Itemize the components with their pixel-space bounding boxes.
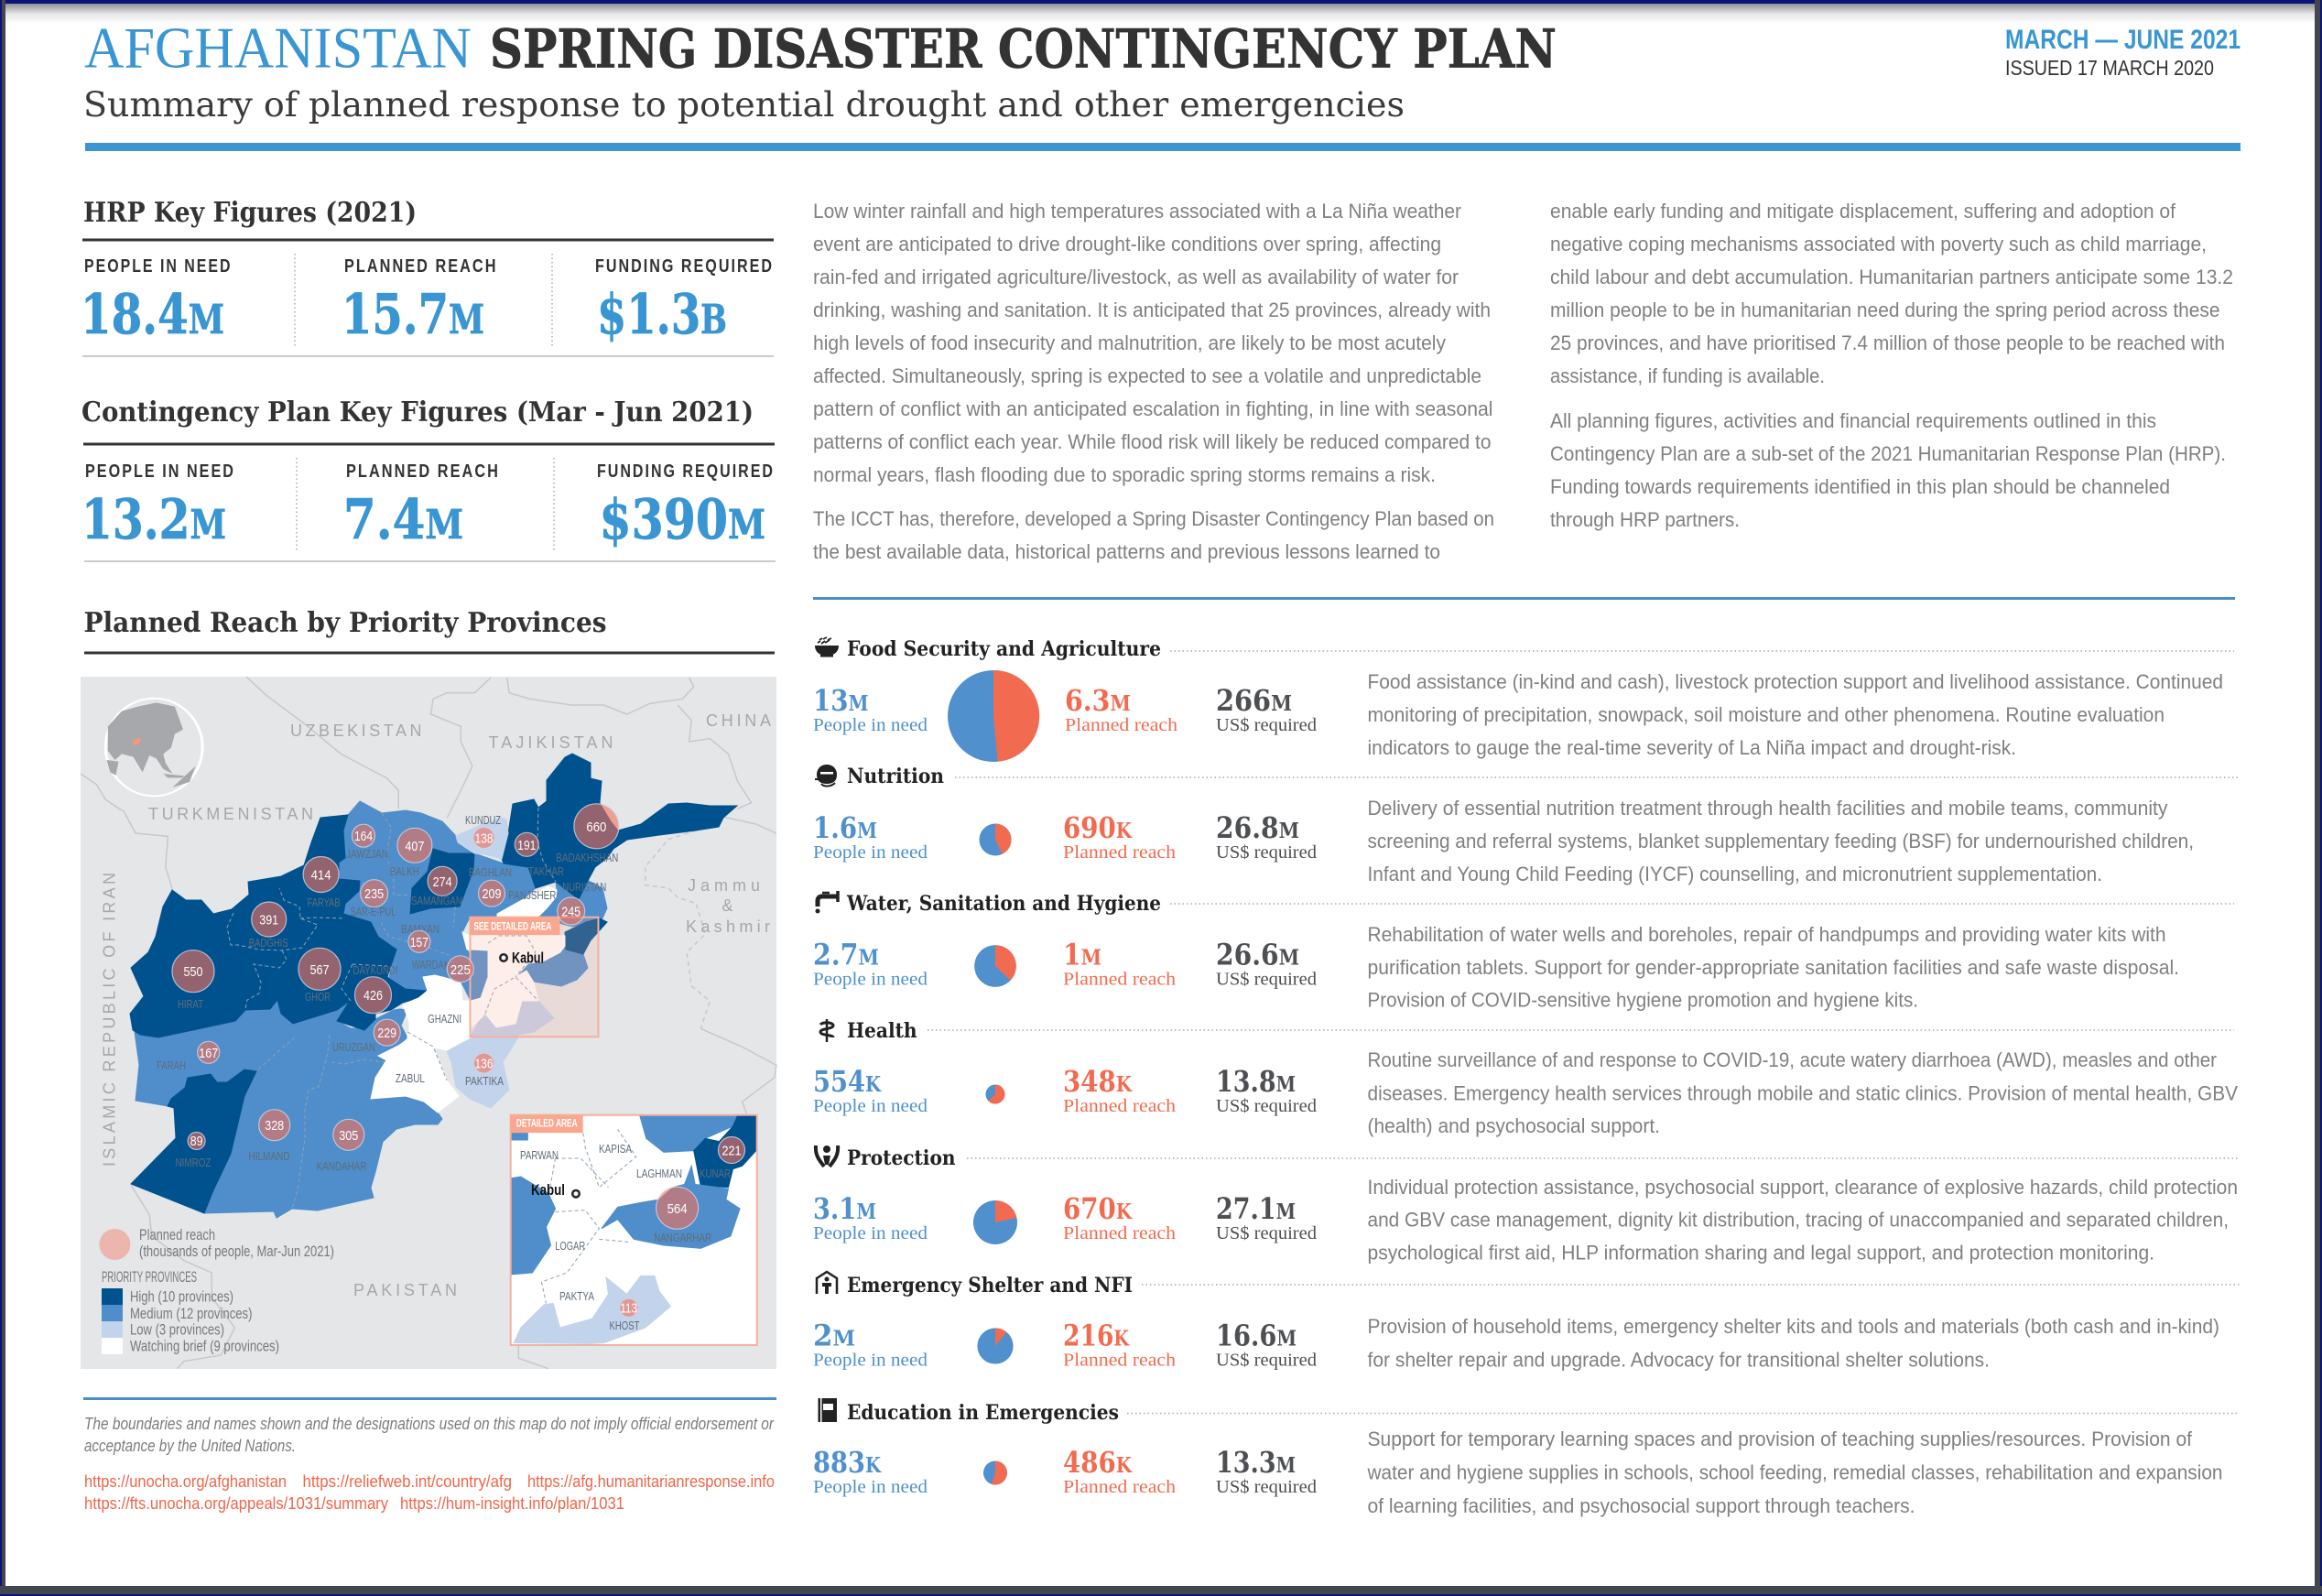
funding: 16.6M [1216, 1319, 1297, 1353]
planned reach [1063, 1319, 1176, 1370]
province labels [157, 813, 618, 1173]
funding: US$ required [1216, 715, 1317, 735]
pie chart [974, 945, 1016, 987]
people in need [813, 810, 928, 863]
icon: hands and person [816, 1145, 838, 1167]
people in need: 13M [813, 683, 868, 718]
people in need: People in need [813, 969, 928, 989]
links: https://reliefweb.int/country/afg [302, 1472, 512, 1491]
description: screening and referral systems, blanket supplementary feeding (BSF) for undernourished children, [1368, 830, 2194, 852]
description: indicators to gauge the real-time severity of La Niña impact and drought-risk. [1368, 736, 2016, 759]
links: https://hum-insight.info/plan/1031 [400, 1494, 624, 1513]
people in need [813, 938, 928, 989]
figure: contingency planned reach: 7.4M [343, 488, 463, 552]
planned reach: Planned reach [1063, 1223, 1176, 1243]
people in need: People in need [813, 1350, 928, 1370]
intro text column 1: Low winter rainfall and high temperatures associated with a La Niña weather [813, 200, 1461, 223]
people in need: People in need [813, 1477, 928, 1497]
icon: book [819, 1398, 837, 1422]
province labels: FARYAB [308, 896, 341, 909]
planned reach bubbles: 225 [450, 962, 471, 978]
planned reach: Planned reach [1063, 842, 1176, 863]
intro text column 1: affected. Simultaneously, spring is expected to see a volatile and unpredictable [813, 364, 1481, 387]
heading: Emergency Shelter and NFI [847, 1274, 1133, 1297]
date block [2005, 25, 2241, 80]
funding: 13.3M [1216, 1445, 1296, 1480]
funding: US$ required [1216, 842, 1317, 863]
planned reach bubbles: 113 [620, 1300, 637, 1317]
people in need [813, 683, 928, 735]
country labels: & [722, 896, 733, 915]
icon: staff with snake [820, 1019, 833, 1042]
inset: detailed area: LOGAR [555, 1239, 585, 1253]
people in need [813, 1064, 928, 1116]
heading: contingency plan key figures: Contingency Plan Key Figures (Mar - Jun 2021) [81, 396, 754, 429]
figure: contingency planned reach: PLANNED REACH [346, 461, 500, 482]
province labels: JAWZJAN [346, 847, 388, 861]
map legend: Medium (12 provinces) [130, 1305, 253, 1322]
medium-priority provinces [135, 801, 607, 1218]
province labels: SAMANGAN [411, 894, 462, 907]
inset: detailed area [511, 1115, 757, 1345]
disclaimer: The boundaries and names shown and the designations used on this map do not imply official endorsement or [84, 1415, 775, 1433]
planned reach bubbles: 567 [309, 962, 330, 978]
inset: detailed area: NANGARHAR [654, 1231, 711, 1244]
pie chart [948, 670, 1039, 762]
funding [1216, 938, 1317, 989]
planned reach [1063, 1191, 1176, 1243]
planned reach bubbles: 138 [474, 831, 493, 846]
province labels: TAKHAR [528, 864, 564, 878]
sector: health [813, 1019, 2238, 1137]
planned reach: 348K [1063, 1064, 1133, 1099]
pie chart [983, 1461, 1007, 1485]
heading: Protection [847, 1146, 956, 1170]
planned reach: 1M [1063, 938, 1101, 972]
map panel [81, 677, 776, 1369]
funding: 266M [1216, 683, 1292, 718]
country labels: Kashmir [686, 917, 770, 936]
links: https://fts.unocha.org/appeals/1031/summary [84, 1494, 388, 1513]
description: (health) and psychosocial support. [1368, 1114, 1660, 1137]
province labels: FARAH [157, 1059, 186, 1072]
intro text column 2: Funding towards requirements identified in this plan should be channeled [1550, 475, 2170, 498]
inset: detailed area: KHOST [610, 1319, 640, 1332]
planned reach bubbles: 164 [354, 829, 373, 844]
province labels: BAMYAN [401, 922, 439, 936]
planned reach [1063, 1445, 1176, 1497]
intro text column 2: 25 provinces, and have prioritised 7.4 million of those people to be reached with [1550, 331, 2225, 354]
funding [1216, 1191, 1317, 1243]
people in need: People in need [813, 1096, 928, 1116]
province labels: BADAKHSHAN [556, 851, 618, 864]
pie chart [980, 824, 1011, 855]
planned reach: Planned reach [1063, 1350, 1176, 1370]
date block: ISSUED 17 MARCH 2020 [2005, 56, 2214, 80]
people in need: People in need [813, 715, 928, 735]
icon: bowl with grain [815, 637, 839, 657]
province labels: DAYKUNDI [353, 963, 397, 977]
sector: water, sanitation and hygiene [813, 891, 2234, 1011]
description [1368, 1176, 2238, 1264]
planned reach bubbles: 414 [311, 868, 331, 883]
description [1367, 1428, 2223, 1517]
description [1368, 923, 2179, 1011]
inset: detailed area: PAKTYA [559, 1289, 594, 1303]
intro text column 1: the best available data, historical patterns and previous lessons learned to [813, 540, 1440, 563]
planned reach: 670K [1063, 1191, 1133, 1226]
map legend: (thousands of people, Mar-Jun 2021) [139, 1243, 334, 1260]
planned reach bubbles: 550 [183, 964, 203, 980]
description: Rehabilitation of water wells and boreholes, repair of handpumps and providing water kits with [1368, 923, 2166, 946]
description: Infant and Young Child Feeding (IYCF) counselling, and micronutrient supplementation. [1368, 863, 2102, 885]
high-priority provinces [130, 754, 737, 1213]
disclaimer: acceptance by the United Nations. [84, 1437, 296, 1455]
people in need: People in need [813, 1223, 928, 1243]
inset: detailed area: Kabul [531, 1181, 565, 1199]
country labels [101, 711, 771, 1299]
planned reach bubbles [172, 804, 745, 1317]
province labels: GHOR [305, 990, 331, 1004]
province labels: SAR-E-PUL [350, 905, 396, 918]
map legend: Watching brief (9 provinces) [130, 1338, 279, 1355]
figure: contingency funding required: FUNDING REQUIRED [597, 461, 775, 482]
people in need [813, 1319, 928, 1370]
intro text column 2 [1550, 200, 2233, 531]
description [1368, 797, 2194, 885]
funding: 13.8M [1216, 1064, 1296, 1099]
figure: funding required: $1.3B [597, 283, 727, 347]
map legend [99, 1226, 334, 1355]
inset: detailed area: KUNAR [700, 1167, 731, 1180]
province labels: KUNDUZ [465, 813, 501, 827]
people in need: 883K [813, 1445, 882, 1480]
planned reach bubbles: 305 [339, 1128, 358, 1144]
planned reach bubbles: 235 [364, 886, 384, 902]
province labels: URUZGAN [332, 1040, 375, 1054]
people in need [813, 1445, 928, 1497]
icon: person under shelter [817, 1272, 837, 1294]
description: and GBV case management, dignity kit distribution, tracing of unaccompanied and separated children, [1368, 1209, 2229, 1231]
planned reach bubbles: 229 [377, 1026, 396, 1041]
watching-brief provinces [371, 886, 565, 1113]
figure: contingency people in need: PEOPLE IN NEED [85, 461, 235, 482]
province labels: BAGHLAN [469, 865, 512, 879]
inset: detailed area: KAPISA [599, 1142, 632, 1156]
planned reach bubbles: 328 [265, 1118, 284, 1134]
province labels: NIMROZ [176, 1156, 212, 1169]
people in need: 1.6M [813, 810, 877, 845]
figure: contingency funding required: $390M [599, 488, 765, 552]
country labels: TAJIKISTAN [489, 733, 613, 752]
intro text column 2: All planning figures, activities and financial requirements outlined in this [1550, 409, 2156, 432]
heading: Health [847, 1019, 917, 1043]
province labels: WARDAK [412, 958, 450, 972]
planned reach: 690K [1063, 810, 1133, 845]
province labels: HIRAT [178, 997, 203, 1011]
planned reach bubbles: 191 [517, 838, 536, 853]
pie chart [985, 1084, 1005, 1104]
icon: head with spoon [815, 765, 837, 787]
figure: people in need: PEOPLE IN NEED [84, 256, 233, 277]
see detailed area box: SEE DETAILED AREA [473, 920, 552, 933]
intro text column 1: high levels of food insecurity and malnutrition, are likely to be most acutely [813, 331, 1446, 354]
globe locator [105, 699, 202, 796]
header rule [85, 143, 2241, 151]
description: psychological first aid, HLP information sharing and legal support, and protection monitoring. [1368, 1242, 2154, 1264]
intro text column 2: million people to be in humanitarian need during the spring period across these [1550, 299, 2219, 321]
description [1368, 1048, 2238, 1137]
planned reach bubbles: 136 [474, 1057, 493, 1071]
figure: contingency planned reach [343, 461, 500, 552]
funding: US$ required [1216, 969, 1317, 989]
province labels: HILMAND [249, 1149, 289, 1163]
planned reach bubbles: 426 [363, 988, 383, 1004]
country labels: CHINA [706, 711, 771, 730]
planned reach bubbles: 157 [410, 935, 429, 950]
planned reach bubbles: 209 [482, 886, 502, 902]
planned reach: Planned reach [1063, 1096, 1176, 1116]
figure: planned reach: 15.7M [342, 283, 484, 347]
description: Delivery of essential nutrition treatment through health facilities and mobile teams, community [1368, 797, 2168, 820]
intro text column 1: event are anticipated to drive drought-like conditions over spring, affecting [813, 233, 1441, 255]
figure: contingency people in need: 13.2M [81, 488, 226, 552]
heading: Water, Sanitation and Hygiene [846, 892, 1161, 916]
funding: US$ required [1216, 1223, 1317, 1243]
date block: MARCH — JUNE 2021 [2005, 25, 2241, 55]
intro text column 2: enable early funding and mitigate displacement, suffering and adoption of [1550, 200, 2176, 223]
intro text column 1: patterns of conflict each year. While flood risk will likely be reduced compared to [813, 430, 1491, 453]
funding [1216, 1064, 1317, 1116]
province labels: BALKH [390, 864, 419, 878]
sector: nutrition [813, 765, 2239, 885]
planned reach bubbles: 221 [722, 1143, 742, 1159]
map legend: High (10 provinces) [130, 1288, 233, 1306]
description: purification tablets. Support for gender-appropriate sanitation facilities and safe waste disposal. [1368, 956, 2179, 979]
description: of learning facilities, and psychosocial support through teachers. [1368, 1494, 1915, 1517]
description: Food assistance (in-kind and cash), livestock protection support and livelihood assistance. Continued [1368, 670, 2223, 693]
description: Provision of household items, emergency shelter kits and tools and materials (both cash and in-kind) [1368, 1315, 2219, 1338]
planned reach bubbles: 89 [190, 1134, 203, 1149]
country labels: PAKISTAN [353, 1281, 457, 1299]
people in need: 2.7M [813, 938, 879, 972]
heading: HRP key figures: HRP Key Figures (2021) [83, 197, 417, 229]
funding: US$ required [1216, 1477, 1317, 1497]
province labels: BADGHIS [249, 936, 288, 950]
planned reach: Planned reach [1063, 1477, 1176, 1497]
funding [1216, 1319, 1317, 1370]
sector: food security and agriculture [813, 637, 2234, 762]
figure: funding required [595, 256, 774, 347]
planned reach: Planned reach [1063, 969, 1176, 989]
inset: detailed area: PARWAN [520, 1148, 559, 1162]
sector: protection [813, 1145, 2238, 1264]
description: Individual protection assistance, psychosocial support, clearance of explosive hazards, child protection [1368, 1176, 2238, 1199]
planned reach bubbles: 245 [561, 905, 580, 919]
planned reach bubbles: 274 [433, 874, 452, 890]
title: AFGHANISTAN [84, 16, 472, 81]
people in need: People in need [813, 842, 928, 863]
people in need: 2M [813, 1319, 855, 1353]
funding: 26.8M [1216, 810, 1299, 845]
map legend: Planned reach [139, 1226, 215, 1243]
province labels: KANDAHAR [317, 1159, 366, 1173]
planned reach bubbles: 564 [667, 1201, 688, 1217]
see detailed area box: Kabul [512, 950, 544, 967]
planned reach bubbles: 407 [405, 839, 424, 854]
planned reach bubbles: 167 [199, 1046, 218, 1061]
province labels: ZABUL [396, 1071, 425, 1085]
figure: planned reach: PLANNED REACH [344, 256, 498, 277]
subtitle: Summary of planned response to potential drought and other emergencies [83, 85, 1405, 125]
description [1368, 1315, 2219, 1372]
funding: 27.1M [1216, 1191, 1296, 1226]
people in need: 554K [813, 1064, 882, 1099]
planned reach: Planned reach [1065, 715, 1177, 735]
heading: Education in Emergencies [847, 1401, 1119, 1425]
description [1368, 670, 2223, 759]
figure: people in need: 18.4M [81, 283, 224, 347]
intro text column 1: The ICCT has, therefore, developed a Spring Disaster Contingency Plan based on [813, 507, 1494, 530]
map legend: PRIORITY PROVINCES [102, 1268, 197, 1286]
description: Routine surveillance of and response to COVID-19, acute watery diarrhoea (AWD), measles and other [1368, 1048, 2217, 1071]
neighbouring country borders [81, 677, 776, 1369]
intro text column 2: through HRP partners. [1550, 508, 1740, 531]
funding: US$ required [1216, 1096, 1317, 1116]
inset: detailed area: LAGHMAN [636, 1167, 682, 1180]
links [84, 1472, 775, 1513]
intro text column 2: child labour and debt accumulation. Humanitarian partners anticipate some 13.2 [1550, 266, 2233, 288]
intro text column 1: pattern of conflict with an anticipated escalation in fighting, in line with seasonal [813, 397, 1492, 420]
pie chart [973, 1200, 1017, 1244]
figure: contingency funding required [597, 461, 775, 552]
see detailed area box [471, 917, 599, 1037]
icon: tap with drop [815, 891, 838, 914]
description: diseases. Emergency health services through mobile and static clinics. Provision of mental health, GBV [1368, 1082, 2238, 1104]
figure: planned reach [342, 256, 498, 347]
links: https://unocha.org/afghanistan [84, 1472, 287, 1491]
description: monitoring of precipitation, snowpack, soil moisture and other phenomena. Routine evaluation [1368, 703, 2165, 726]
planned reach [1063, 1064, 1176, 1116]
description: Support for temporary learning spaces and provision of teaching supplies/resources. Provision of [1368, 1428, 2193, 1450]
title: SPRING DISASTER CONTINGENCY PLAN [490, 18, 1557, 81]
country labels: TURKMENISTAN [148, 805, 313, 823]
planned reach: 486K [1063, 1445, 1133, 1480]
heading: planned reach by priority provinces: Planned Reach by Priority Provinces [84, 607, 606, 639]
footer: disclaimer and links [83, 1397, 776, 1513]
planned reach bubbles: 660 [586, 820, 606, 835]
intro text column 2: assistance, if funding is available. [1550, 364, 1825, 387]
pie chart [977, 1328, 1014, 1364]
planned reach: 6.3M [1065, 683, 1131, 718]
intro text column 2: negative coping mechanisms associated with poverty such as child marriage, [1550, 233, 2207, 255]
district boundaries [227, 808, 556, 1209]
people in need [813, 1191, 928, 1243]
funding [1216, 1445, 1317, 1497]
intro text column 1: rain-fed and irrigated agriculture/livestock, as well as availability of water for [813, 266, 1459, 288]
funding: 26.6M [1216, 938, 1299, 972]
funding [1216, 810, 1317, 863]
country labels: Jammu [688, 876, 760, 895]
panel: contingency plan key figures [81, 396, 776, 562]
country labels: ISLAMIC REPUBLIC OF IRAN [101, 873, 119, 1167]
heading: Food Security and Agriculture [847, 637, 1161, 661]
figure: funding required: FUNDING REQUIRED [595, 256, 774, 277]
funding [1216, 683, 1317, 735]
intro text column 1: normal years, flash flooding due to sporadic spring storms remains a risk. [813, 463, 1436, 486]
province labels: NURISTAN [562, 880, 606, 894]
intro text column 2: Contingency Plan are a sub-set of the 2021 Humanitarian Response Plan (HRP). [1550, 442, 2226, 465]
inset: detailed area: DETAILED AREA [516, 1117, 578, 1130]
panel: HRP key figures [81, 197, 774, 357]
province labels: PANJSHER [508, 888, 556, 902]
heading: Nutrition [847, 765, 944, 788]
country labels: UZBEKISTAN [290, 722, 421, 740]
funding: US$ required [1216, 1350, 1317, 1370]
intro text column 1 [813, 200, 1494, 563]
people in need: 3.1M [813, 1191, 876, 1226]
province labels: PAKTIKA [465, 1074, 504, 1088]
sector: education in emergencies [813, 1398, 2237, 1517]
disclaimer [84, 1415, 775, 1455]
planned reach [1065, 683, 1177, 735]
links: https://afg.humanitarianresponse.info [527, 1472, 775, 1491]
planned reach [1063, 938, 1176, 989]
province labels: GHAZNI [428, 1012, 461, 1026]
planned reach [1063, 810, 1176, 863]
sector: emergency shelter and NFI [813, 1272, 2241, 1372]
description: for shelter repair and upgrade. Advocacy for transitional shelter solutions. [1368, 1348, 1990, 1372]
planned reach bubbles: 391 [259, 912, 278, 928]
description: Provision of COVID-sensitive hygiene promotion and hygiene kits. [1368, 989, 1918, 1011]
low-priority provinces [447, 818, 554, 1108]
intro text column 1: drinking, washing and sanitation. It is anticipated that 25 provinces, already with [813, 299, 1491, 321]
description: water and hygiene supplies in schools, school feeding, remedial classes, rehabilitation and expansion [1367, 1461, 2223, 1483]
map legend: Low (3 provinces) [130, 1321, 224, 1339]
planned reach: 216K [1063, 1319, 1130, 1353]
